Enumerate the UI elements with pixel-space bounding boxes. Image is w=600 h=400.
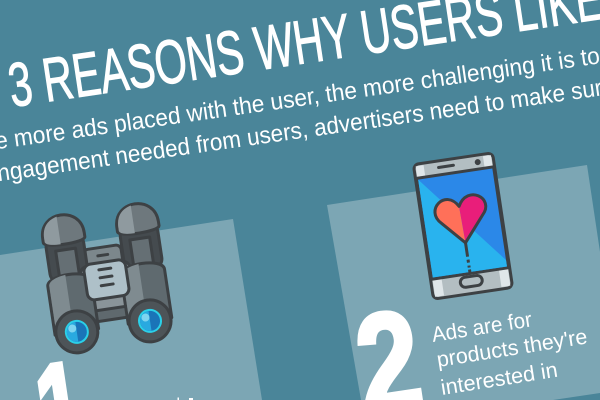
center body [79,260,135,312]
left barrel [47,271,99,335]
top hinge [83,244,123,270]
icon: binoculars [38,201,176,356]
panel: reason 1 [0,219,262,400]
heart balloon [433,193,495,276]
icon: smartphone with heart [413,153,513,299]
phone body [413,153,513,299]
panel: reason 2 [327,165,600,400]
phone bezel highlights [416,155,510,297]
center plate [83,259,130,301]
reason 2 text [430,307,589,400]
clipped tops of reason 1 text [178,398,193,400]
screen diagonal [418,169,507,278]
screen [416,167,509,279]
speaker [437,164,455,169]
left lens [53,308,101,356]
reason 2 line 2: products they're [435,324,589,372]
camera [474,159,481,166]
right barrel [120,260,172,324]
right eyepiece [114,201,165,273]
right lens [126,297,174,345]
subtitle text block [0,42,600,189]
home button [460,275,483,288]
bottom hinge [91,297,131,322]
reason 2 line 3: interested in [439,358,559,400]
left eyepiece [40,212,91,284]
reason 2 line 1: Ads are for [430,307,534,347]
